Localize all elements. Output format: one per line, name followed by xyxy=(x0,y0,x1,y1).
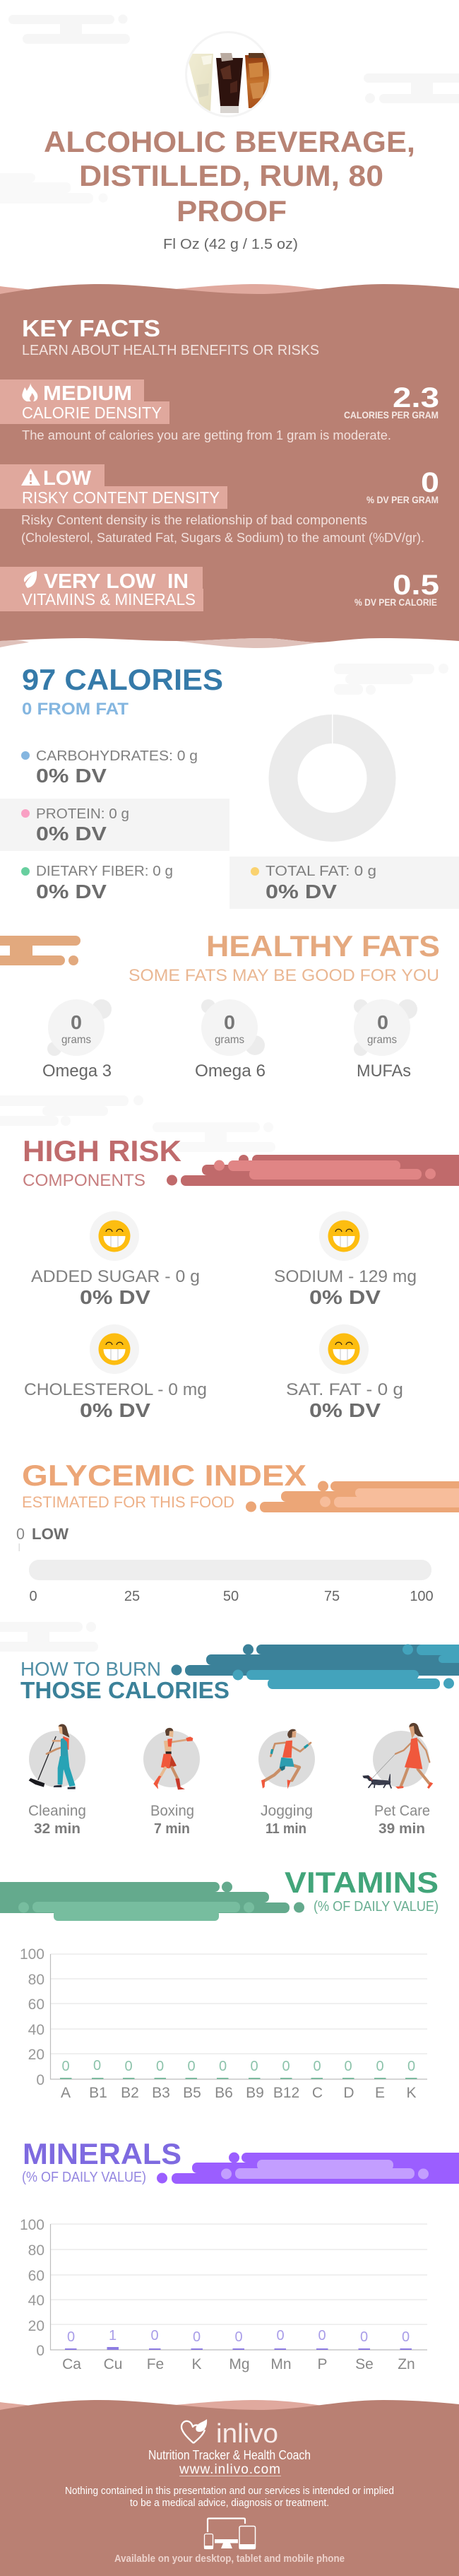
title: PROOF xyxy=(177,194,287,228)
title: DISTILLED, RUM, 80 xyxy=(79,159,383,192)
activity: cleaning: Cleaning xyxy=(28,1803,86,1819)
activity: pet care xyxy=(362,1723,433,1837)
decoration: red stripes xyxy=(167,1155,459,1186)
heading: how to burn: HOW TO BURN xyxy=(20,1658,161,1680)
background cloud: high risk right xyxy=(153,1122,275,1152)
bar chart: vitamins: 80 xyxy=(28,1972,44,1988)
bar chart: vitamins: B3 xyxy=(152,2085,170,2101)
logo: inlivo: inlivo xyxy=(216,2419,278,2449)
fat: omega 6: Omega 6 xyxy=(195,1061,266,1081)
bar chart: minerals: 0 xyxy=(150,2328,159,2343)
risk item: sodium xyxy=(274,1211,417,1308)
nutrient: protein: 0% DV xyxy=(36,823,107,845)
icon: jogger xyxy=(261,1729,311,1789)
bar chart: vitamins: B5 xyxy=(183,2085,201,2101)
fat: omega 3 xyxy=(42,999,112,1081)
badge: low risky content density: LOW xyxy=(43,467,92,490)
food photo: glasses of rum xyxy=(185,31,271,117)
panel: key facts xyxy=(0,284,459,648)
bar chart: vitamins: B9 xyxy=(246,2085,264,2101)
stat: % dv per gram: % DV PER GRAM xyxy=(366,494,439,505)
bar chart: minerals: Se xyxy=(355,2356,374,2372)
activity: boxing: 7 min xyxy=(154,1821,190,1837)
panel: glycemic index xyxy=(16,1459,459,1604)
title: ALCOHOLIC BEVERAGE, xyxy=(44,125,415,158)
icon: warning xyxy=(21,469,40,486)
logo: inlivo xyxy=(181,2419,278,2449)
gauge scale: 25 xyxy=(124,1589,140,1604)
heading: those calories: THOSE CALORIES xyxy=(20,1677,230,1703)
risk item: cholesterol: 0% DV xyxy=(80,1399,150,1421)
fat: mufas xyxy=(354,999,417,1081)
activity: boxing: Boxing xyxy=(150,1803,194,1819)
risk item: added sugar: ADDED SUGAR - 0 g xyxy=(31,1267,200,1286)
bar chart: minerals: 1 xyxy=(109,2328,117,2343)
bar chart: vitamins: 0 xyxy=(344,2059,352,2074)
nutrient: total fat xyxy=(230,857,459,909)
nutrient: protein: PROTEIN: 0 g xyxy=(36,806,129,822)
panel: minerals xyxy=(20,2137,459,2372)
background cloud: top left xyxy=(8,14,130,44)
background cloud: top right xyxy=(364,73,459,103)
risk item: cholesterol: CHOLESTEROL - 0 mg xyxy=(24,1380,207,1399)
badge: very low in vitamins and minerals xyxy=(0,567,203,611)
subheading: from fat: 0 FROM FAT xyxy=(22,700,129,719)
bar chart: minerals: 40 xyxy=(28,2293,44,2309)
activity: boxing xyxy=(143,1728,200,1837)
description: risky content density xyxy=(21,513,424,545)
bar chart: minerals: 60 xyxy=(28,2268,44,2284)
gauge bar xyxy=(29,1560,431,1580)
panel: calories xyxy=(0,663,459,909)
fat: omega 3: Omega 3 xyxy=(42,1061,112,1081)
subheading: minerals: (% OF DAILY VALUE) xyxy=(22,2170,146,2185)
bar chart: vitamins: 100 xyxy=(20,1946,44,1963)
nutrient: total fat: TOTAL FAT: 0 g xyxy=(266,864,376,879)
nutrient: carbohydrates: 0% DV xyxy=(36,765,107,787)
panel: vitamins xyxy=(0,1866,439,2101)
bar chart: vitamins: 0 xyxy=(219,2059,227,2074)
panel: healthy fats xyxy=(0,929,440,1081)
bar chart: minerals: 0 xyxy=(360,2329,368,2345)
bar chart: vitamins: K xyxy=(406,2085,417,2101)
gauge scale: 75 xyxy=(324,1589,340,1604)
heading: glycemic index: GLYCEMIC INDEX xyxy=(22,1459,306,1492)
risk item: sodium: SODIUM - 129 mg xyxy=(274,1267,417,1286)
fat: mufas: 0 xyxy=(377,1011,388,1033)
badge: very low in vitamins and minerals: VERY LOW IN xyxy=(44,570,189,593)
panel: how to burn those calories xyxy=(20,1644,459,1837)
fat: mufas: MUFAs xyxy=(357,1061,411,1081)
bar chart: minerals: 0 xyxy=(234,2329,243,2345)
subheading: components: COMPONENTS xyxy=(23,1171,145,1190)
bar chart: minerals: Fe xyxy=(147,2356,164,2372)
fat: omega 6 xyxy=(195,999,266,1081)
bar chart: vitamins: 0 xyxy=(250,2059,258,2074)
fat: mufas: grams xyxy=(367,1034,397,1046)
bar chart: minerals: 0 xyxy=(318,2328,326,2343)
activity: jogging: Jogging xyxy=(261,1803,313,1819)
gauge: glycemic value marker: LOW xyxy=(32,1525,68,1543)
nutrient: dietary fiber xyxy=(21,864,173,902)
risk item: added sugar xyxy=(31,1211,200,1308)
decoration: orange stripes xyxy=(246,1481,459,1512)
gauge: glycemic value marker xyxy=(16,1525,68,1551)
bar chart: minerals: P xyxy=(317,2356,328,2372)
risk item: saturated fat: SAT. FAT - 0 g xyxy=(286,1380,403,1399)
decoration: green stripes xyxy=(0,1881,304,1921)
nutrient: carbohydrates: CARBOHYDRATES: 0 g xyxy=(36,748,198,764)
heading: vitamins: VITAMINS xyxy=(285,1866,439,1899)
activity: pet care: 39 min xyxy=(378,1821,425,1837)
fat: omega 3: grams xyxy=(61,1034,91,1046)
bar chart: minerals: 20 xyxy=(28,2318,44,2334)
bar chart: vitamins: C xyxy=(312,2085,323,2101)
bar chart: vitamins: 0 xyxy=(407,2059,415,2074)
stat: % dv per gram: 0 xyxy=(421,467,439,498)
stat: % dv per calorie: 0.5 xyxy=(393,570,439,601)
background cloud: high risk left xyxy=(0,1095,143,1126)
bar chart: vitamins: A xyxy=(61,2085,71,2101)
bar chart: minerals: 0 xyxy=(193,2329,201,2345)
bar chart: vitamins: 0 xyxy=(61,2059,70,2074)
background cloud: burn calories xyxy=(0,1622,98,1652)
badge: low risky content density: RISKY CONTENT DENSITY xyxy=(22,488,220,507)
donut chart xyxy=(283,714,381,827)
subheading: estimated for this food: ESTIMATED FOR THIS FOOD xyxy=(22,1493,234,1511)
bar chart: vitamins: D xyxy=(343,2085,354,2101)
bar chart: vitamins: E xyxy=(375,2085,385,2101)
icon: person sweeping xyxy=(29,1724,76,1789)
nutrient: carbohydrates xyxy=(21,748,198,787)
bar chart: minerals: K xyxy=(191,2356,202,2372)
bar chart: minerals: Ca xyxy=(62,2356,81,2372)
disclaimer: Nothing contained in this presentation and our services is intended or implied xyxy=(65,2485,394,2497)
background cloud: left of title xyxy=(0,173,107,204)
bar chart: vitamins: B12 xyxy=(273,2085,299,2101)
bar chart: vitamins: 20 xyxy=(28,2047,44,2063)
bar chart: minerals: 0 xyxy=(36,2343,44,2359)
bar chart: vitamins: 0 xyxy=(124,2059,133,2074)
risk item: saturated fat: 0% DV xyxy=(309,1399,381,1421)
icon: grinning emoji xyxy=(90,1324,139,1374)
website link: www.inlivo.com xyxy=(179,2462,280,2477)
nutrient: dietary fiber: DIETARY FIBER: 0 g xyxy=(36,864,173,879)
risk item: sodium: 0% DV xyxy=(309,1286,381,1308)
serving size: Fl Oz (42 g / 1.5 oz) xyxy=(163,237,298,252)
title xyxy=(44,125,415,228)
gauge scale: 0 xyxy=(29,1589,37,1604)
gauge scale: 50 xyxy=(223,1589,239,1604)
icon: flame xyxy=(22,383,37,401)
disclaimer: to be a medical advice, diagnosis or treatment. xyxy=(130,2497,329,2509)
subheading: healthy fats: SOME FATS MAY BE GOOD FOR YOU xyxy=(129,966,439,985)
nutrient: total fat: 0% DV xyxy=(266,881,337,902)
stat: calories per gram xyxy=(344,382,439,420)
description: risky content density: Risky Content density is the relationship of bad components xyxy=(21,513,367,527)
bar chart: minerals: Zn xyxy=(398,2356,415,2372)
icon: woman walking dog xyxy=(362,1723,433,1789)
icon: grinning emoji xyxy=(319,1324,369,1374)
bar chart: minerals xyxy=(20,2217,427,2372)
availability note: Available on your desktop, tablet and mobile phone xyxy=(114,2553,345,2565)
bar chart: vitamins: 0 xyxy=(36,2072,44,2088)
stat: % dv per calorie xyxy=(354,570,439,608)
fat: omega 6: grams xyxy=(215,1034,244,1046)
bar chart: vitamins: 0 xyxy=(187,2059,196,2074)
bar chart: minerals: Mg xyxy=(229,2356,250,2372)
fat: omega 6: 0 xyxy=(224,1011,235,1033)
risk item: added sugar: 0% DV xyxy=(80,1286,150,1308)
icon: leaf xyxy=(24,571,37,588)
panel: high risk components xyxy=(23,1134,459,1421)
subheading: vitamins: (% OF DAILY VALUE) xyxy=(314,1899,439,1915)
bar chart: minerals: 0 xyxy=(402,2329,410,2345)
bar chart: minerals: 80 xyxy=(28,2242,44,2259)
gauge scale xyxy=(29,1589,434,1604)
bar chart: vitamins: 0 xyxy=(313,2059,321,2074)
gauge: glycemic value marker: 0 xyxy=(16,1525,25,1543)
bar chart: minerals: 0 xyxy=(67,2329,75,2345)
badge: medium calorie density xyxy=(0,380,169,424)
decoration: teal stripes xyxy=(171,1644,459,1689)
activity: jogging: 11 min xyxy=(266,1821,306,1837)
bar chart: vitamins: B2 xyxy=(121,2085,139,2101)
heading: high risk: HIGH RISK xyxy=(23,1134,181,1168)
description: risky content density: (Cholesterol, Saturated Fat, Sugars & Sodium) to the amount (%DV/gr). xyxy=(21,531,424,545)
heading: key facts: KEY FACTS xyxy=(22,315,160,341)
gauge scale: 100 xyxy=(410,1589,434,1604)
background cloud: calories xyxy=(334,664,448,695)
stat: % dv per calorie: % DV PER CALORIE xyxy=(354,596,437,608)
activity: cleaning xyxy=(28,1724,86,1837)
icon: grinning emoji xyxy=(319,1211,369,1261)
subheading: key facts: LEARN ABOUT HEALTH BENEFITS OR RISKS xyxy=(22,343,319,358)
stat: calories per gram: CALORIES PER GRAM xyxy=(344,409,439,420)
bar chart: minerals: Mn xyxy=(270,2356,292,2372)
icon: grinning emoji xyxy=(90,1211,139,1261)
stat: calories per gram: 2.3 xyxy=(393,382,439,413)
bar chart: vitamins: B1 xyxy=(89,2085,107,2101)
stat: % dv per gram xyxy=(366,467,439,505)
panel: footer xyxy=(0,2400,459,2576)
bar chart: vitamins xyxy=(20,1946,427,2101)
decoration: purple stripes xyxy=(157,2153,459,2184)
risk item: saturated fat xyxy=(286,1324,403,1421)
bar chart: minerals: 0 xyxy=(276,2328,285,2343)
activity: jogging xyxy=(258,1729,315,1837)
heading: minerals: MINERALS xyxy=(23,2137,181,2170)
risk item: cholesterol xyxy=(24,1324,207,1421)
badge: medium calorie density: CALORIE DENSITY xyxy=(22,404,162,422)
activity: pet care: Pet Care xyxy=(374,1803,430,1819)
heading: 97 calories: 97 CALORIES xyxy=(22,663,223,696)
nutrient: dietary fiber: 0% DV xyxy=(36,881,107,902)
bar chart: minerals: Cu xyxy=(104,2356,122,2372)
bar chart: vitamins: 40 xyxy=(28,2022,44,2038)
bar chart: vitamins: 0 xyxy=(156,2059,164,2074)
bar chart: vitamins: 60 xyxy=(28,1996,44,2013)
bar chart: vitamins: B6 xyxy=(215,2085,233,2101)
icon: devices xyxy=(204,2519,256,2549)
bar chart: vitamins: 0 xyxy=(376,2059,384,2074)
icon: boxer xyxy=(153,1728,193,1789)
badge: very low in vitamins and minerals: VITAMINS & MINERALS xyxy=(22,590,196,608)
bar chart: minerals: 100 xyxy=(20,2217,44,2233)
disclaimer xyxy=(65,2485,394,2509)
description: calorie density: The amount of calories you are getting from 1 gram is moderate. xyxy=(22,428,391,442)
badge: medium calorie density: MEDIUM xyxy=(43,382,132,405)
activity: cleaning: 32 min xyxy=(34,1821,81,1837)
badge: low risky content density xyxy=(0,464,227,509)
nutrient: protein xyxy=(0,799,230,851)
decoration: tan stripes xyxy=(0,936,81,965)
bar chart: vitamins: 0 xyxy=(282,2059,290,2074)
heading: healthy fats: HEALTHY FATS xyxy=(206,929,440,963)
fat: omega 3: 0 xyxy=(71,1011,82,1033)
bar chart: vitamins: 0 xyxy=(93,2058,101,2074)
tagline: Nutrition Tracker & Health Coach xyxy=(148,2448,311,2462)
